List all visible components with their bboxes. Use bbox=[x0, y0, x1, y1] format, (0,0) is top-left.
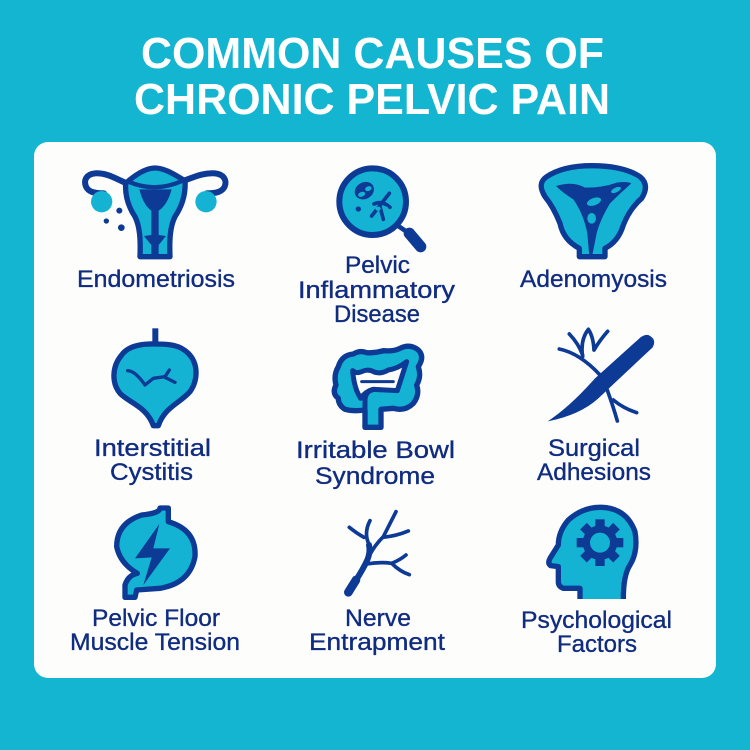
label: irritable bowl syndrome: Irritable Bowl bbox=[296, 437, 455, 464]
label: surgical adhesions bbox=[537, 435, 651, 486]
label: surgical adhesions: Adhesions bbox=[537, 459, 651, 486]
label: irritable bowl syndrome bbox=[296, 437, 455, 490]
label: pelvic inflammatory disease: Inflammatory bbox=[298, 277, 455, 304]
icon: head with gear bbox=[549, 507, 636, 599]
icon: branching nerve bbox=[348, 512, 409, 592]
label: psychological factors: Factors bbox=[557, 631, 637, 658]
label: pelvic inflammatory disease: Pelvic bbox=[345, 252, 410, 279]
title bbox=[134, 29, 610, 124]
label: interstitial cystitis bbox=[94, 435, 211, 486]
label: pelvic floor muscle tension: Pelvic Floor bbox=[92, 605, 220, 632]
icon: uterus with adenomyosis bbox=[541, 166, 645, 257]
icon: magnifying glass with bacteria bbox=[339, 168, 421, 247]
label: psychological factors bbox=[521, 607, 672, 658]
label: nerve entrapment: Entrapment bbox=[309, 629, 445, 656]
icon: intestines bbox=[334, 346, 422, 427]
icon: uterus with endometriosis bbox=[85, 168, 225, 257]
label: psychological factors: Psychological bbox=[521, 607, 672, 634]
label: nerve entrapment bbox=[309, 605, 445, 656]
title: CHRONIC PELVIC PAIN bbox=[134, 75, 610, 124]
label: endometriosis: Endometriosis bbox=[77, 266, 235, 293]
label: irritable bowl syndrome: Syndrome bbox=[315, 463, 435, 490]
icon: scalpel and adhesions bbox=[548, 329, 654, 421]
label: pelvic inflammatory disease: Disease bbox=[334, 301, 420, 328]
label: pelvic inflammatory disease bbox=[298, 252, 455, 328]
label: pelvic floor muscle tension bbox=[70, 605, 240, 656]
label: pelvic floor muscle tension: Muscle Tension bbox=[70, 629, 240, 656]
panel: causes grid bbox=[34, 142, 716, 678]
label: adenomyosis: Adenomyosis bbox=[520, 266, 667, 293]
label: interstitial cystitis: Interstitial bbox=[94, 435, 211, 462]
label: surgical adhesions: Surgical bbox=[548, 435, 640, 462]
label: nerve entrapment: Nerve bbox=[345, 605, 411, 632]
icon: muscle with lightning bolt bbox=[117, 508, 195, 597]
icon: bladder with crack bbox=[114, 328, 196, 426]
label: interstitial cystitis: Cystitis bbox=[110, 459, 193, 486]
title: COMMON CAUSES OF bbox=[141, 29, 604, 78]
